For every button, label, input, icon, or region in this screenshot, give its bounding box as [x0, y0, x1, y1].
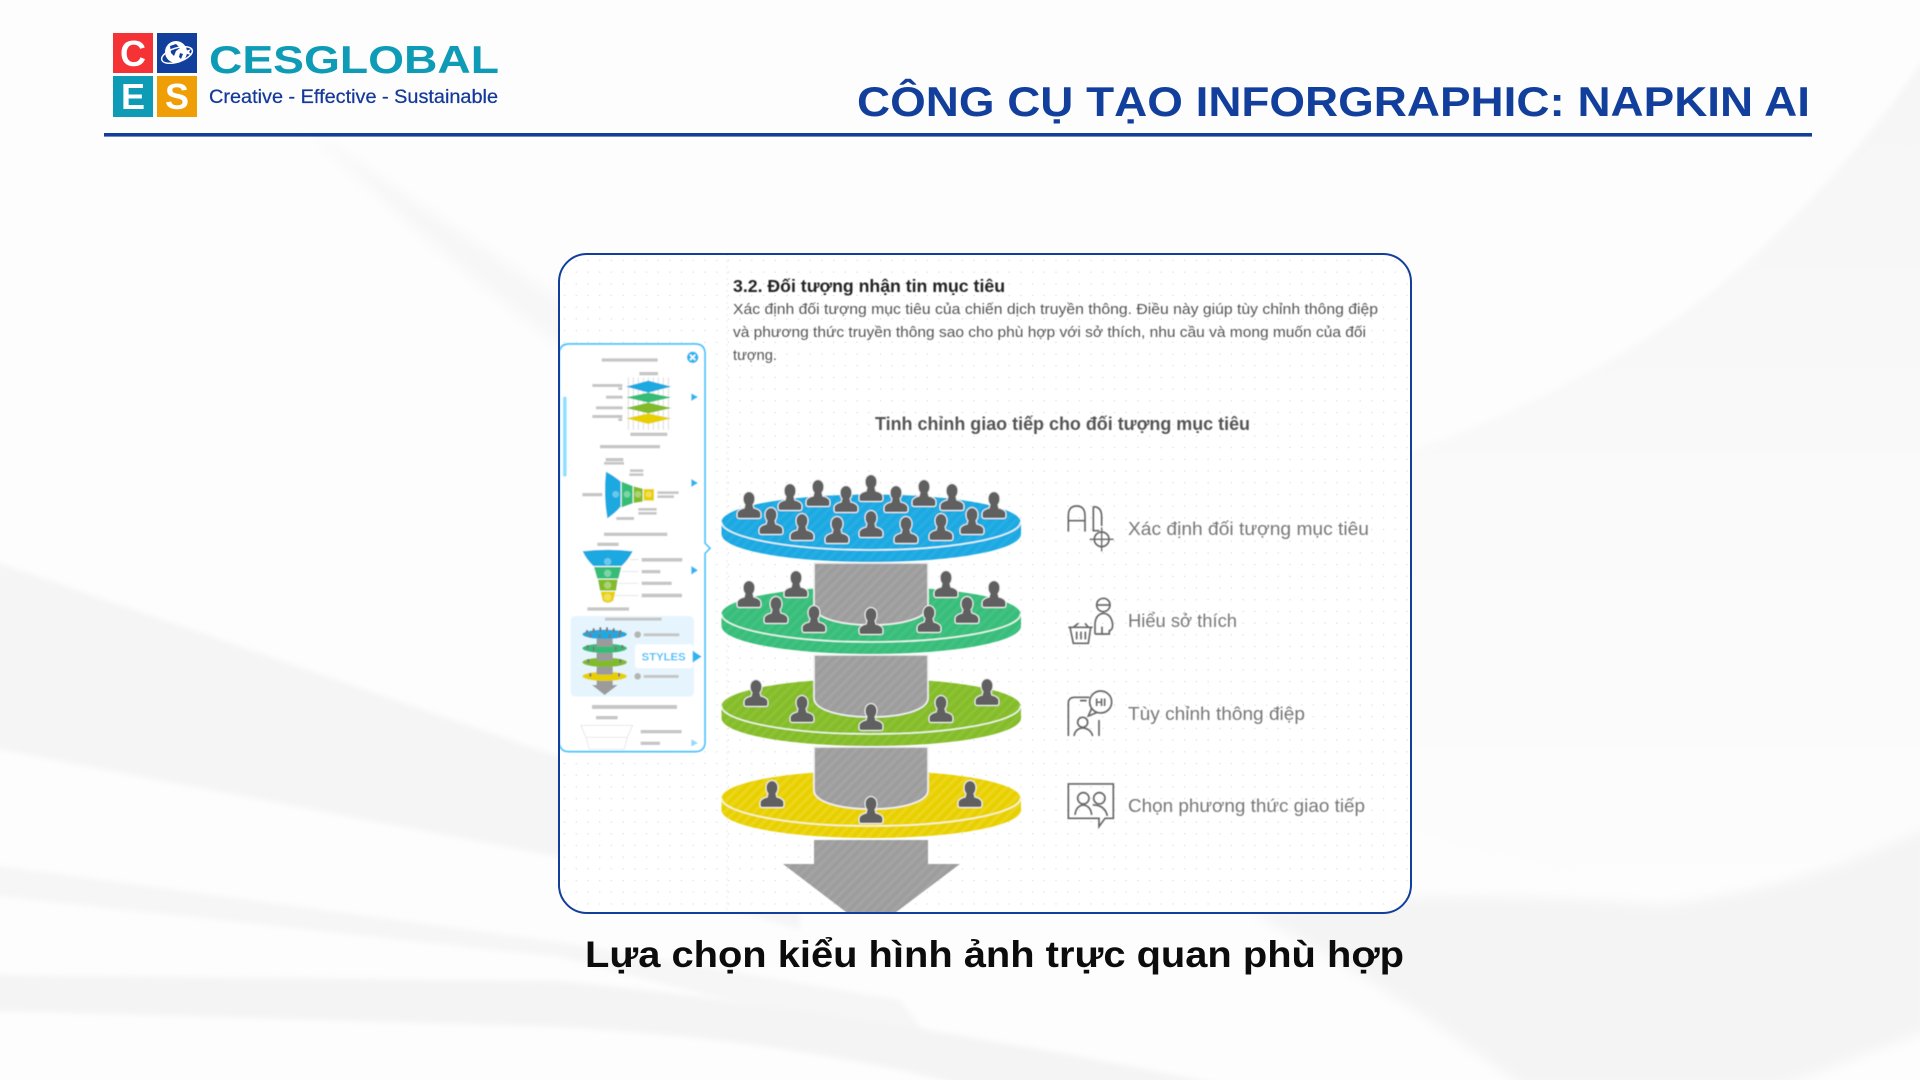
arrow: down [783, 840, 960, 912]
people: green disk [738, 571, 1006, 634]
title: CÔNG CỤ TẠO INFORGRAPHIC: NAPKIN AI [857, 77, 1810, 125]
card description: Xác định đối tượng mục tiêu của chiến dịch truyền thông. Điều này giúp tùy chỉnh thông điệp [733, 302, 1378, 318]
icon: target audience [1068, 506, 1114, 551]
card description [733, 302, 1378, 364]
panel: style picker [559, 344, 710, 752]
style option: selected: STYLES [642, 652, 686, 664]
disk: green [722, 563, 1021, 654]
style option: diamonds [592, 358, 698, 436]
style option: outline funnel [581, 705, 698, 749]
people: yellow disk [760, 781, 982, 823]
logo square E [113, 76, 153, 117]
label: channel: Chọn phương thức giao tiếp [1128, 795, 1365, 816]
icon: communication [1068, 784, 1113, 827]
scrollbar [563, 397, 567, 477]
card heading: 3.2. Đối tượng nhận tin mục tiêu [733, 276, 1005, 296]
style option: vertical funnel [583, 533, 698, 611]
people: lime disk [744, 679, 998, 730]
disk: blue [722, 494, 1021, 562]
disk: lime [722, 655, 1021, 746]
close button [687, 352, 698, 363]
people: blue disk [738, 475, 1006, 543]
style option: selected [571, 616, 702, 697]
logo square S: S [165, 76, 189, 117]
card description: và phương thức truyền thông sao cho phù hợp với sở thích, nhu cầu và mong muốn của đối [733, 325, 1366, 341]
label: message: Tùy chỉnh thông điệp [1128, 703, 1305, 724]
logo [113, 33, 499, 117]
chart: stacked disks [722, 475, 1021, 931]
disk: yellow [722, 747, 1021, 838]
panel: napkin card [559, 254, 1411, 931]
logo tagline: Creative - Effective - Sustainable [209, 86, 498, 108]
style option: horizontal funnel [582, 445, 698, 520]
chart title: Tinh chỉnh giao tiếp cho đối tượng mục tiêu [875, 413, 1250, 434]
logo square globe [157, 33, 197, 73]
label: interest: Hiểu sở thích [1128, 610, 1237, 631]
icon: message: HI [1095, 697, 1106, 709]
logo square E: E [121, 76, 145, 117]
card description: tượng. [733, 348, 777, 364]
icon: shopper [1068, 598, 1113, 643]
label: target: Xác định đối tượng mục tiêu [1128, 518, 1369, 539]
logo square C [113, 33, 153, 74]
icon: message [1068, 691, 1112, 736]
logo square S [157, 76, 197, 117]
logo square C: C [120, 33, 146, 74]
caption: Lựa chọn kiểu hình ảnh trực quan phù hợp [585, 933, 1404, 975]
logo wordmark: CESGLOBAL [209, 39, 499, 82]
